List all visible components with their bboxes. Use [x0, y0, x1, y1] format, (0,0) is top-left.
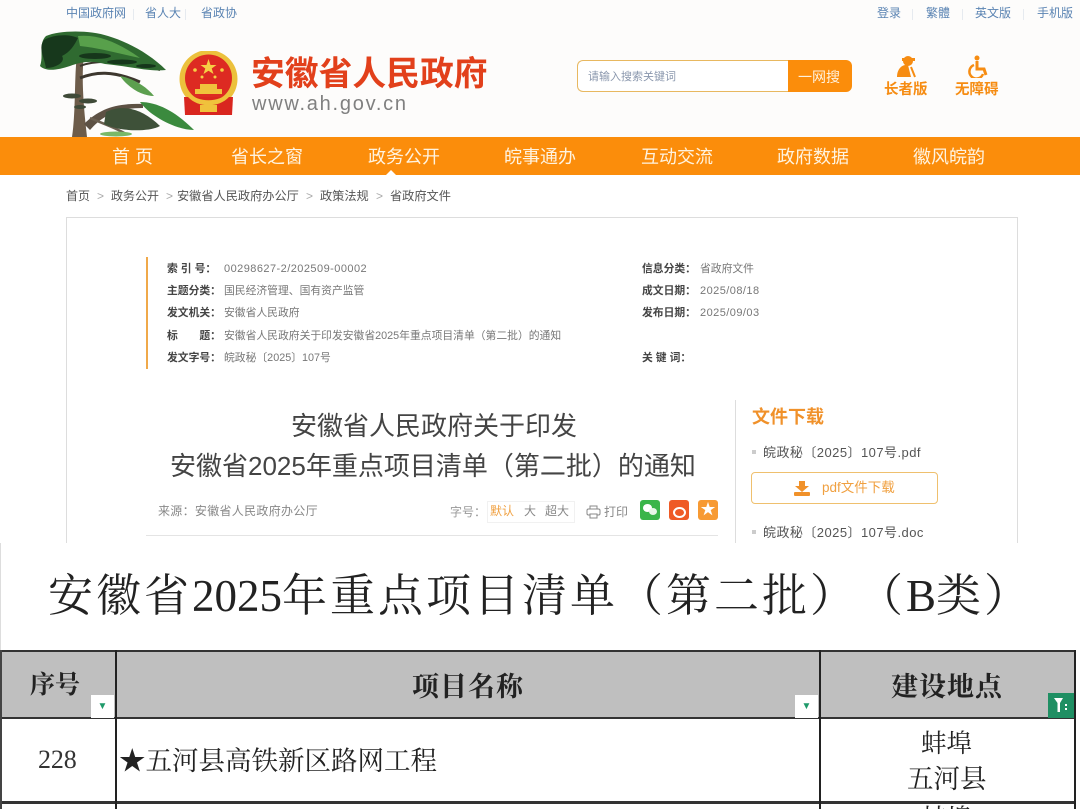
panel: document metadata: 安徽省人民政府 — [224, 307, 300, 319]
row 228: 228 — [38, 745, 77, 774]
navigation bar — [0, 137, 1080, 175]
navigation bar: 徽风皖韵 — [913, 147, 985, 167]
breadcrumb: > — [306, 189, 313, 203]
row 228 — [38, 729, 986, 794]
icon: weibo — [669, 500, 689, 520]
top links right: 登录 — [877, 6, 901, 20]
breadcrumb: 政务公开 — [111, 189, 159, 203]
panel: document metadata: 皖政秘〔2025〕107号 — [224, 352, 331, 364]
breadcrumb: 政策法规 — [320, 189, 369, 203]
panel: document metadata: 关 键 词： — [642, 352, 691, 364]
top links left — [66, 6, 237, 20]
table header row: 序号 — [30, 672, 80, 699]
top links right: 英文版 — [975, 6, 1011, 20]
panel: document metadata: 发布日期： — [642, 307, 696, 319]
panel: document metadata: 标 题： — [167, 330, 221, 342]
article heading: 安徽省人民政府关于印发 — [291, 411, 577, 441]
site url: www.ah.gov.cn — [252, 93, 408, 115]
row 228: 蚌埠 — [921, 729, 972, 758]
header background — [0, 0, 1080, 137]
search box — [577, 60, 852, 92]
filter button: ▼ — [802, 701, 811, 712]
pdf file name: 皖政秘〔2025〕107号.pdf — [763, 445, 921, 460]
icon: favourite star — [698, 500, 718, 520]
download heading: 文件下载 — [752, 407, 824, 427]
icon: favourite star: ★ — [700, 501, 716, 518]
breadcrumb: 省政府文件 — [390, 189, 451, 203]
elder version button: 长者版 — [884, 82, 928, 98]
search box: 请输入搜索关键词 — [588, 71, 676, 83]
navigation bar: 皖事通办 — [504, 147, 576, 167]
navigation bar: 省长之窗 — [231, 147, 303, 167]
panel: project list image — [0, 543, 1080, 650]
panel: document metadata: 安徽省人民政府关于印发安徽省2025年重点项目清单（第二批）的通知 — [224, 330, 561, 342]
navigation bar: 互动交流 — [641, 147, 713, 167]
breadcrumb: > — [376, 189, 383, 203]
divider under tools — [146, 535, 718, 536]
panel: document metadata: 主题分类： — [167, 285, 221, 297]
icon: printer — [586, 506, 600, 518]
panel: document metadata: 索 引 号： — [167, 263, 216, 275]
breadcrumb: 首页 — [66, 189, 90, 203]
top links left: 中国政府网 — [66, 6, 126, 20]
panel: document metadata: 省政府文件 — [700, 263, 754, 275]
panel: article frame — [66, 217, 1018, 558]
top links left: 省人大 — [145, 6, 181, 20]
next row divider — [0, 801, 1076, 804]
breadcrumb: > — [166, 189, 173, 203]
font size and share tools: 超大 — [545, 504, 569, 518]
icon: pine tree — [40, 32, 194, 137]
site name: 安徽省人民政府 — [251, 55, 488, 93]
row 228: 五河县 — [907, 764, 986, 794]
filter button — [795, 695, 818, 718]
accessibility button — [955, 56, 998, 98]
search box: 一网搜 — [798, 69, 840, 85]
font size and share tools: 打印 — [604, 505, 628, 519]
panel: document metadata: 00298627-2/202509-00002 — [224, 263, 367, 275]
icon: national emblem — [180, 51, 238, 115]
navigation bar: 政务公开 — [368, 147, 440, 167]
navigation bar: 政府数据 — [777, 147, 849, 167]
pdf download button: pdf文件下载 — [822, 480, 895, 495]
breadcrumb: 安徽省人民政府办公厅 — [177, 189, 299, 203]
top links right: 繁體 — [926, 6, 950, 20]
list title: 安徽省2025年重点项目清单（第二批）（B类） — [48, 571, 1032, 621]
active filter button — [1048, 693, 1074, 718]
table — [0, 650, 1076, 809]
panel: file download — [735, 400, 996, 545]
pdf download button — [751, 472, 938, 504]
panel: document metadata: 发文机关： — [167, 307, 221, 319]
filter button: ▼ — [98, 701, 107, 712]
breadcrumb: > — [97, 189, 104, 203]
panel: document metadata: 2025/09/03 — [700, 307, 760, 319]
elder version button — [884, 56, 928, 98]
panel: document metadata: 发文字号： — [167, 352, 221, 364]
accessibility button: 无障碍 — [955, 82, 998, 98]
font size and share tools: 默认 — [490, 504, 514, 518]
panel: document metadata: 成文日期： — [642, 285, 696, 297]
filter button — [91, 695, 114, 718]
panel: document metadata: 国民经济管理、国有资产监管 — [224, 285, 364, 297]
table header row — [0, 650, 1076, 719]
article heading: 安徽省2025年重点项目清单（第二批）的通知 — [170, 451, 696, 481]
icon: wechat — [640, 500, 660, 520]
top links left: 省政协 — [201, 6, 237, 20]
navigation bar: 首 页 — [112, 147, 153, 167]
font size and share tools — [450, 500, 718, 523]
article heading — [170, 411, 696, 481]
panel: document metadata — [146, 257, 768, 369]
breadcrumb — [66, 189, 451, 203]
icon: elder person — [897, 56, 916, 78]
icon: wheelchair — [968, 56, 988, 78]
column lines — [115, 650, 117, 809]
table header row: 项目名称 — [412, 672, 524, 702]
panel: document metadata: 信息分类： — [642, 263, 696, 275]
top links right — [877, 6, 1073, 20]
panel: document metadata: 2025/08/18 — [700, 285, 760, 297]
font size and share tools: 大 — [524, 504, 536, 518]
article source: 来源：安徽省人民政府办公厅 — [158, 504, 318, 518]
top links right: 手机版 — [1037, 6, 1073, 20]
doc file name: 皖政秘〔2025〕107号.doc — [763, 525, 924, 540]
row 228: ★五河县高铁新区路网工程 — [119, 746, 437, 776]
font size and share tools: 字号： — [450, 505, 486, 519]
table header row: 建设地点 — [891, 672, 1003, 702]
